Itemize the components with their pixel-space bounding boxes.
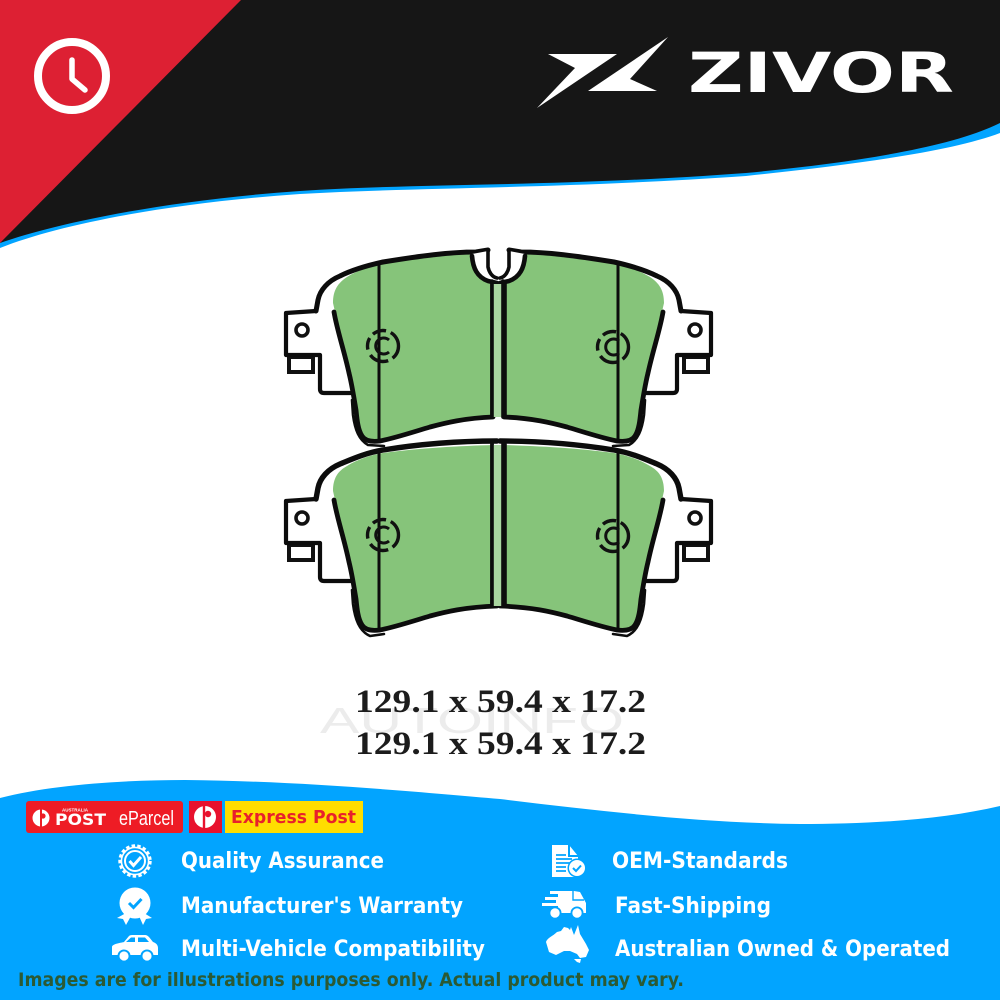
disclaimer: Images are for illustrations purposes only. Actual product may vary.: [18, 969, 684, 991]
dimensions: second pad: 129.1 x 59.4 x 17.2: [355, 726, 646, 762]
badge: Express Post: Express Post: [231, 808, 356, 828]
icon: delivery truck: [542, 891, 586, 919]
logo: ZIVOR mark: [537, 37, 668, 108]
icon: quality badge: [120, 846, 150, 876]
footer panel: blue wave: [0, 780, 1000, 1000]
feature: Multi-Vehicle Compatibility: Multi-Vehicle Compatibility: [181, 936, 485, 962]
header accent: blue curve: [0, 100, 1000, 248]
icon: Australia map: [546, 925, 589, 963]
icon: clock: [38, 42, 106, 110]
icon: warranty ribbon: [117, 888, 152, 925]
feature: Manufacturer's Warranty: Manufacturer's Warranty: [181, 893, 463, 919]
header: red corner: [0, 0, 241, 243]
feature: OEM-Standards: OEM-Standards: [612, 848, 788, 874]
icon: document: [552, 845, 586, 878]
badge: Australia Post eParcel: POST: [55, 810, 106, 829]
feature: Australian Owned & Operated: Australian Owned & Operated: [615, 936, 950, 962]
icon: car: [112, 935, 158, 962]
logo: ZIVOR wordmark: ZIVOR: [688, 41, 954, 105]
brake pad: lower: [286, 441, 711, 636]
header: black banner: [0, 0, 1000, 243]
badge: Express Post: [189, 801, 363, 833]
brake pad: upper: [286, 250, 711, 446]
badge: Australia Post eParcel: AUSTRALIA: [62, 808, 89, 812]
feature: Fast-Shipping: Fast-Shipping: [615, 893, 771, 919]
feature: Quality Assurance: Quality Assurance: [181, 848, 384, 874]
badge: Australia Post eParcel: [26, 801, 183, 833]
badge: Australia Post eParcel: eParcel: [119, 808, 174, 830]
watermark: AUTOINFO: [320, 700, 624, 741]
dimensions: first pad: 129.1 x 59.4 x 17.2: [355, 684, 646, 720]
